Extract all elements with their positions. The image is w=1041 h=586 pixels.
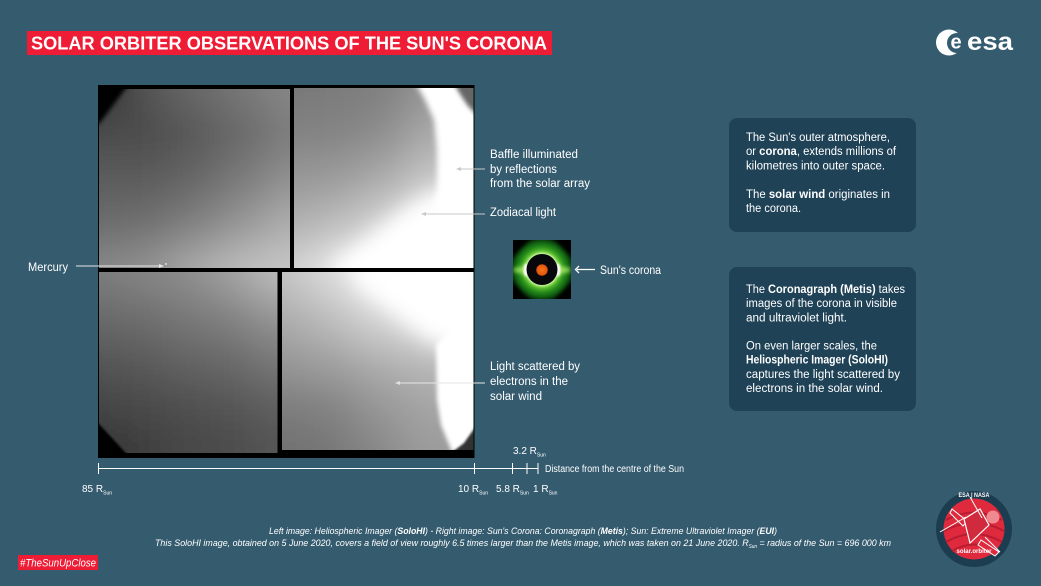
distance scale: Sun <box>537 452 546 458</box>
text box: instruments: The Coronagraph (Metis) takes <box>746 284 905 296</box>
text box: corona and solar wind <box>729 118 916 232</box>
label: light scattered by electrons <box>395 361 580 403</box>
label: zodiacal light: Zodiacal light <box>490 207 557 219</box>
panel: bottom-left detector <box>99 272 278 453</box>
icon: Solar Orbiter mission badge: solar.orbiter <box>956 548 992 555</box>
text box: instruments: Heliospheric Imager (SoloHI) <box>746 354 888 366</box>
label: light scattered by electrons: Light scattered by <box>490 361 580 373</box>
icon: esa logo <box>936 28 1014 56</box>
icon: Solar Orbiter mission badge: ESA | NASA <box>958 493 990 499</box>
icon: Solar Orbiter mission badge <box>936 491 1012 567</box>
Mercury dot <box>165 263 167 265</box>
text box: instruments: and ultraviolet light. <box>746 312 847 324</box>
label: Mercury <box>28 262 164 274</box>
text box: corona and solar wind: or corona, extends millions of <box>746 146 897 158</box>
label: baffle: by reflections <box>490 164 557 176</box>
text box: instruments: On even larger scales, the <box>746 340 877 352</box>
label: zodiacal light <box>421 207 557 219</box>
distance scale: 3.2 R <box>513 446 537 457</box>
distance scale: 10 R <box>458 484 479 495</box>
distance scale: Distance from the centre of the Sun <box>545 464 684 475</box>
distance scale: 85 R <box>82 484 103 495</box>
text box: instruments <box>729 267 916 411</box>
distance scale: Sun <box>520 490 529 496</box>
panel: bottom-right detector <box>282 272 474 450</box>
panel: top-left detector <box>99 89 290 268</box>
label: baffle: Baffle illuminated <box>490 149 578 161</box>
caption: Left image: Heliospheric Imager (SoloHI) - Right image: Sun's Corona: Coronagraph (Metis); Sun: Extreme Ultraviolet Imager (EUI) <box>269 526 777 537</box>
label: light scattered by electrons: electrons in the <box>490 376 568 388</box>
title: SOLAR ORBITER OBSERVATIONS OF THE SUN'S CORONA <box>31 34 547 54</box>
caption: = radius of the Sun = 696 000 km <box>757 538 891 549</box>
Sun's corona image <box>513 240 571 299</box>
label: baffle: from the solar array <box>490 178 590 190</box>
caption <box>155 526 891 550</box>
caption: This SoloHI image, obtained on 5 June 2020, covers a field of view roughly 6.5 times larger than the Metis image, which was taken on 21 June 2020. R <box>155 538 789 549</box>
distance scale <box>82 446 684 496</box>
panel: top-right detector with zodiacal light <box>294 88 474 268</box>
text box: corona and solar wind: the corona. <box>746 203 801 215</box>
label: light scattered by electrons: solar wind <box>490 391 542 403</box>
icon: esa logo: esa <box>967 28 1014 56</box>
distance scale: 1 R <box>533 484 549 495</box>
text box: corona and solar wind: kilometres into outer space. <box>746 160 885 172</box>
icon: esa logo: e <box>950 32 962 54</box>
caption: Sun <box>749 544 757 550</box>
label: Mercury: Mercury <box>28 262 68 274</box>
distance scale: 5.8 R <box>496 484 520 495</box>
text box: instruments: electrons in the solar wind. <box>746 383 883 395</box>
label: baffle <box>456 149 590 190</box>
distance scale: Sun <box>103 490 112 496</box>
SoloHI image <box>98 85 474 458</box>
text box: corona and solar wind: The Sun's outer atmosphere, <box>746 132 890 144</box>
distance scale: Sun <box>479 490 488 496</box>
distance scale: Sun <box>549 490 558 496</box>
hashtag: #TheSunUpClose <box>20 558 96 570</box>
text box: instruments: images of the corona in visible <box>746 298 897 310</box>
label: Sun's corona <box>576 265 662 277</box>
text box: instruments: captures the light scattered by <box>746 369 900 381</box>
text box: corona and solar wind: The solar wind originates in <box>746 189 890 201</box>
label: Sun's corona: Sun's corona <box>600 265 662 277</box>
